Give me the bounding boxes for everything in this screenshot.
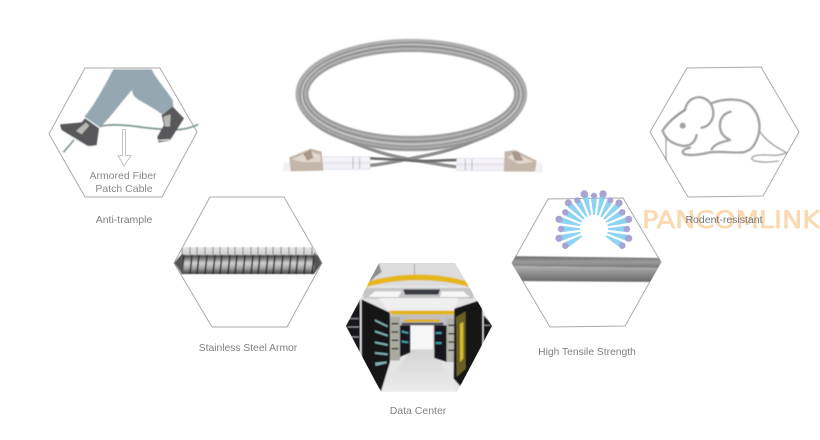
- logo wordmark: PANCOMLINK: [642, 206, 820, 234]
- steel coil sample: [174, 247, 322, 274]
- arrow pointing at cable: [118, 130, 131, 166]
- panel: data center: [345, 262, 493, 392]
- hexagon outline: [49, 68, 197, 197]
- left LC connector: [283, 149, 370, 171]
- caption: high tensile strength: High Tensile Strength: [538, 347, 636, 358]
- panel: anti-trample: [49, 68, 198, 197]
- icon: mouse: [663, 97, 787, 162]
- hexagon outline: [512, 198, 661, 327]
- caption: data center: Data Center: [390, 405, 447, 417]
- jacketed cable sample: [505, 256, 665, 282]
- panel: stainless steel armor: [174, 197, 322, 327]
- cable label: Armored Fiber: [89, 170, 157, 182]
- right LC connector: [457, 150, 543, 173]
- logo spokes: [560, 195, 628, 247]
- illustration: walking legs on cable: [60, 69, 198, 152]
- watermark: logo: [555, 190, 820, 249]
- caption: stainless steel armor: Stainless Steel Armor: [199, 343, 298, 354]
- caption: anti-trample: Anti-trample: [96, 214, 152, 226]
- hexagon outline: [650, 67, 799, 197]
- product: armored fiber patch cable: [283, 41, 543, 173]
- panel: high tensile strength: [505, 198, 665, 327]
- caption: rodent-resistant: Rodent-resistant: [685, 214, 763, 226]
- cable coil: [298, 41, 525, 150]
- cable label second line: Patch Cable: [95, 183, 153, 195]
- photo: server room aisle: [345, 262, 493, 392]
- cable tails crossing: [313, 120, 507, 167]
- logo dots: [555, 190, 632, 249]
- hexagon outline: [174, 197, 322, 327]
- panel: rodent-resistant: [650, 67, 799, 197]
